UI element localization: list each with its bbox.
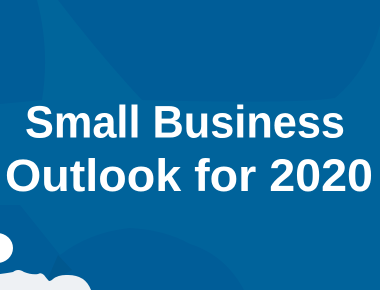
background shape: dark triangle bottom [45, 255, 72, 285]
icon: cloud bottom [0, 270, 91, 290]
title line 1: Small Business [25, 96, 345, 148]
background shape: light wedge top left [37, 0, 142, 100]
title [5, 96, 373, 201]
title line 2: Outlook for 2020 [5, 150, 373, 201]
icon: cloud top fragment [0, 233, 13, 263]
